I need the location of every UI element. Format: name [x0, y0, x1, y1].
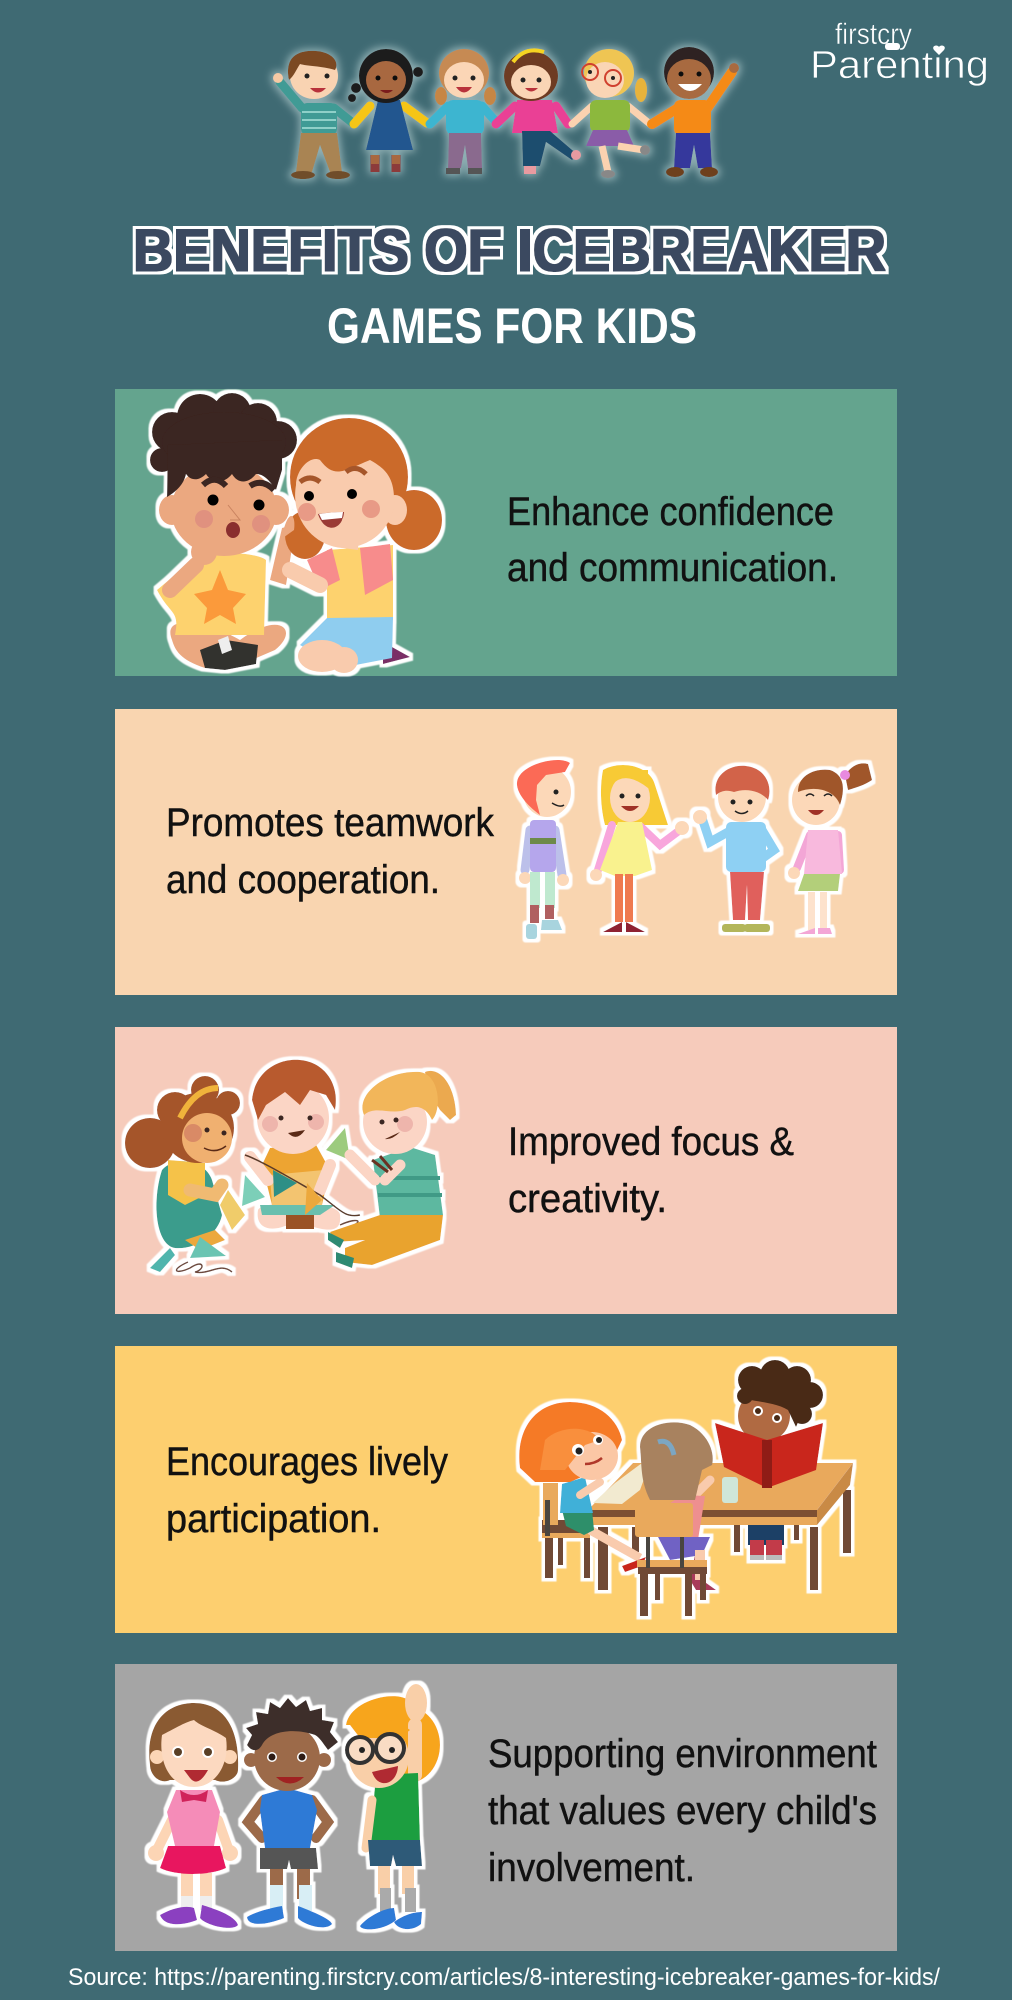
header illustration: six kids holding hands — [273, 47, 739, 179]
text: benefit 3 — [508, 1120, 794, 1221]
icon: heart — [933, 46, 945, 55]
text: benefit 3: creativity. — [508, 1177, 667, 1221]
illustration: kids reading at a desk — [519, 1360, 853, 1616]
girl with blonde ponytail — [328, 1071, 456, 1268]
open book on the table — [593, 1463, 650, 1504]
logo: FirstCry Parenting: Parenting — [810, 44, 989, 87]
kid 4 pink sweater — [496, 50, 581, 174]
girl in pink — [148, 1703, 238, 1928]
kid 2 blue dress — [348, 49, 427, 172]
boy with glasses and green shirt — [346, 1684, 440, 1929]
title: GAMES FOR KIDS — [327, 298, 697, 354]
title: BENEFITS OF ICEBREAKER — [133, 217, 886, 284]
girl with orange hair — [519, 1402, 646, 1578]
boy in orange shirt — [250, 1060, 340, 1230]
text: benefit 5: involvement. — [488, 1846, 695, 1890]
source line: Source: https://parenting.firstcry.com/articles/8-interesting-icebreaker-games-for-kids/ — [68, 1964, 940, 1991]
hourglass — [722, 1477, 738, 1503]
girl seen from behind on a chair — [635, 1422, 716, 1616]
text: benefit 1: Enhance confidence — [507, 490, 834, 534]
title — [133, 217, 886, 354]
logo: FirstCry Parenting: firstcry — [835, 18, 912, 51]
boy in blue shirt — [244, 1698, 338, 1927]
illustration: three kids, one raising a hand — [148, 1684, 440, 1929]
bunting triangles and string — [176, 1128, 360, 1272]
table — [588, 1463, 853, 1590]
open red book — [715, 1423, 823, 1488]
kneeling girl — [280, 418, 442, 673]
text: benefit 5: Supporting environment — [488, 1732, 877, 1776]
text: benefit 2: Promotes teamwork — [166, 801, 495, 845]
text: benefit 1 — [507, 490, 838, 590]
panel: confidence and communication — [115, 389, 897, 676]
text: benefit 4: Encourages lively — [166, 1440, 448, 1484]
illustration: boy and girl whispering — [150, 393, 442, 673]
panel: supportive environment — [115, 1664, 897, 1951]
kid 3 blue sweater — [430, 49, 498, 174]
girl with ponytail — [788, 763, 872, 934]
text: benefit 4: participation. — [166, 1497, 381, 1541]
text: benefit 4 — [166, 1440, 448, 1541]
kid 6 orange shirt — [652, 47, 739, 177]
text: benefit 1: and communication. — [507, 546, 838, 590]
panel: focus and creativity — [115, 1027, 897, 1314]
reading boy — [737, 1360, 823, 1560]
panel: teamwork and cooperation — [115, 709, 897, 995]
logo: FirstCry Parenting — [810, 18, 989, 87]
text: benefit 2 — [166, 801, 495, 902]
panel: lively participation — [115, 1346, 897, 1633]
illustration: four standing kids — [517, 760, 872, 939]
girl with curly hair — [125, 1076, 240, 1272]
text: benefit 5 — [488, 1732, 877, 1890]
illustration: three kids making bunting — [125, 1060, 456, 1272]
boy with red hair — [517, 760, 571, 939]
boy in blue shirt — [693, 766, 774, 932]
seated boy — [150, 393, 297, 670]
blonde girl in yellow dress — [590, 765, 689, 932]
kid 1 striped shirt — [273, 51, 354, 179]
curly hair — [150, 393, 297, 497]
kid 5 green shirt and glasses — [572, 49, 650, 178]
text: benefit 3: Improved focus & — [508, 1120, 794, 1164]
text: benefit 5: that values every child's — [488, 1789, 877, 1833]
text: benefit 2: and cooperation. — [166, 858, 440, 902]
